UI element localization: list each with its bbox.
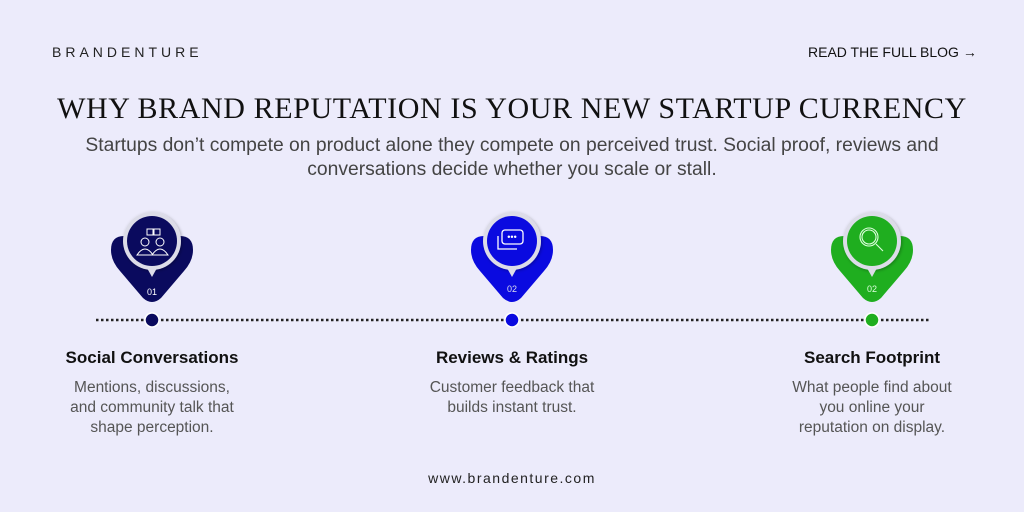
footer url: www.brandenture.com (428, 470, 596, 486)
item 1 (66, 348, 238, 436)
item 3 (792, 348, 952, 436)
logo: BRANDENTURE (52, 44, 203, 60)
item 2: Reviews & Ratings (436, 348, 588, 367)
marker 3: 02 (867, 284, 877, 294)
item 2 (430, 348, 594, 416)
title: WHY BRAND REPUTATION IS YOUR NEW STARTUP CURRENCY (57, 92, 967, 125)
marker 2 (471, 212, 553, 327)
item 3: you online your (819, 399, 925, 416)
item 1: Mentions, discussions, (74, 379, 230, 396)
item 1: Social Conversations (66, 348, 238, 367)
blog link: READ THE FULL BLOG → (808, 44, 977, 60)
item 1: and community talk that (70, 399, 234, 416)
marker 3 (831, 212, 913, 327)
marker 1: 01 (147, 287, 157, 297)
item 2: builds instant trust. (447, 399, 577, 416)
item 2: Customer feedback that (430, 379, 594, 396)
item 3: What people find about (792, 379, 952, 396)
item 3: Search Footprint (804, 348, 940, 367)
subtitle: Startups don’t compete on product alone they compete on perceived trust. Social proof, reviews and conversations decide whether you scale or stall. (85, 135, 939, 180)
timeline (96, 211, 928, 328)
item 1: shape perception. (90, 419, 214, 436)
marker 2: ••• (507, 232, 517, 242)
marker 1 (111, 212, 193, 327)
item 3: reputation on display. (799, 419, 945, 436)
marker 2: 02 (507, 284, 517, 294)
